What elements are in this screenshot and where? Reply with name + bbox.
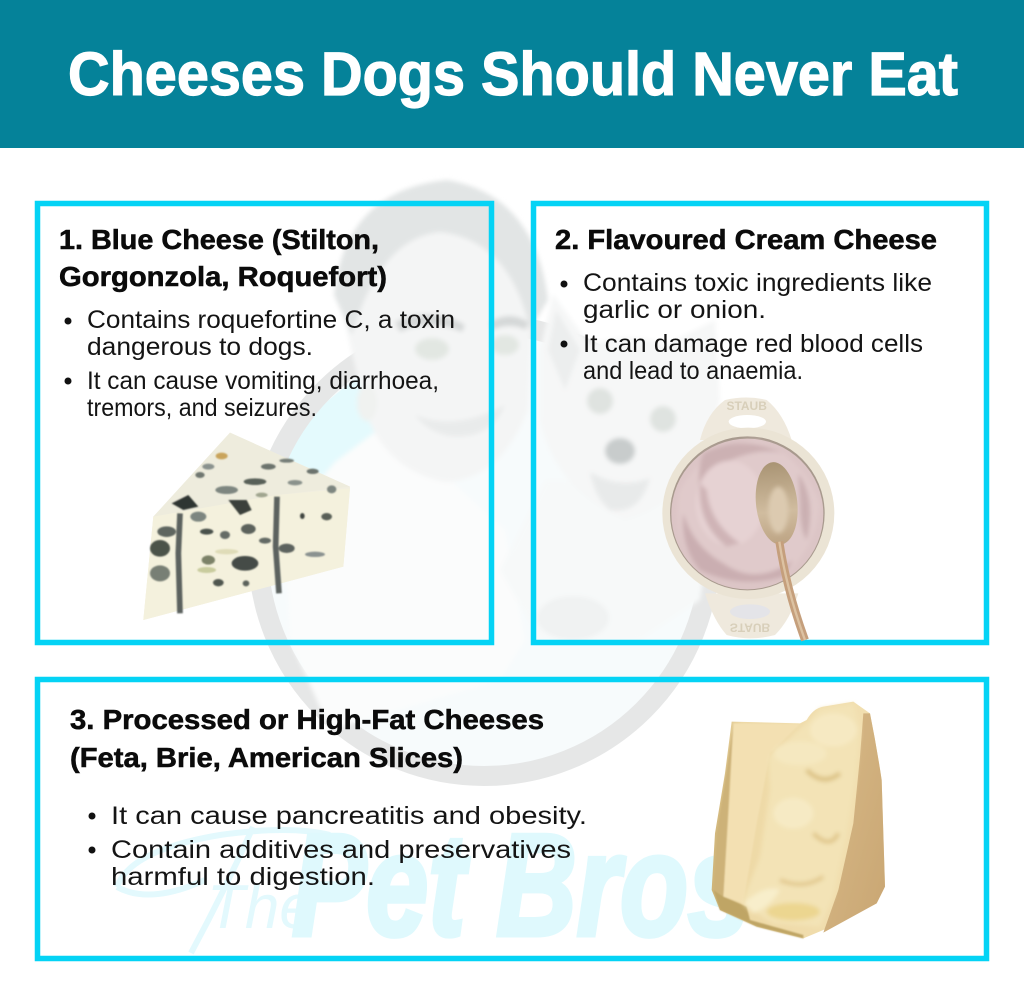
- bullet list: cream cheese: Contains toxic ingredients like: [583, 269, 932, 297]
- watermark: brand wordmark: The: [207, 873, 314, 942]
- bullet list: cream cheese: [560, 269, 932, 385]
- image: aged cheese wedge: [712, 702, 885, 938]
- heading: blue cheese: [59, 224, 387, 292]
- header banner: [0, 0, 1024, 148]
- watermark: man hair: [334, 180, 548, 335]
- watermark: man head: [340, 198, 532, 482]
- panel: blue cheese: [38, 204, 492, 642]
- watermark: brand wordmark: Pet Bros: [292, 804, 750, 966]
- bullet list: processed cheeses: harmful to digestion.: [111, 863, 375, 891]
- bullet list: blue cheese: tremors, and seizures.: [87, 394, 317, 422]
- image: cream cheese ramekin: [662, 397, 834, 640]
- bullet list: blue cheese: It can cause vomiting, diarrhoea,: [87, 367, 439, 395]
- heading: blue cheese: Gorgonzola, Roquefort): [59, 261, 387, 292]
- heading: blue cheese: 1. Blue Cheese (Stilton,: [59, 224, 379, 255]
- watermark: pet bros logo: [258, 180, 720, 776]
- watermark: dog body: [500, 480, 712, 640]
- bullet list: cream cheese: garlic or onion.: [583, 296, 766, 324]
- bullet list: blue cheese: [64, 306, 455, 422]
- heading: flavoured cream cheese: 2. Flavoured Cream Cheese: [555, 224, 937, 255]
- bullet list: processed cheeses: It can cause pancreatitis and obesity.: [111, 802, 587, 830]
- title: Cheeses Dogs Should Never Eat: [68, 40, 958, 108]
- heading: processed cheeses: [70, 704, 544, 773]
- bullet list: cream cheese: It can damage red blood cells: [583, 330, 923, 358]
- image: cream cheese ramekin: STAUB: [730, 620, 771, 634]
- bullet list: blue cheese: dangerous to dogs.: [87, 333, 313, 361]
- watermark: brand wordmark: [117, 804, 750, 966]
- panel: flavoured cream cheese: [534, 204, 986, 642]
- watermark: dog head: [540, 294, 720, 520]
- bullet list: cream cheese: and lead to anaemia.: [583, 357, 803, 385]
- image: blue cheese wedge: [143, 433, 350, 620]
- bullet list: blue cheese: Contains roquefortine C, a toxin: [87, 306, 455, 334]
- heading: processed cheeses: 3. Processed or High-Fat Cheeses: [70, 704, 544, 735]
- panel: processed or high-fat cheeses: [38, 680, 986, 958]
- image: cream cheese ramekin: STAUB: [726, 399, 767, 413]
- bullet list: processed cheeses: [88, 802, 587, 891]
- watermark: man shirt: [285, 432, 525, 730]
- bullet list: processed cheeses: Contain additives and preservatives: [111, 836, 571, 864]
- heading: processed cheeses: (Feta, Brie, American Slices): [70, 742, 463, 773]
